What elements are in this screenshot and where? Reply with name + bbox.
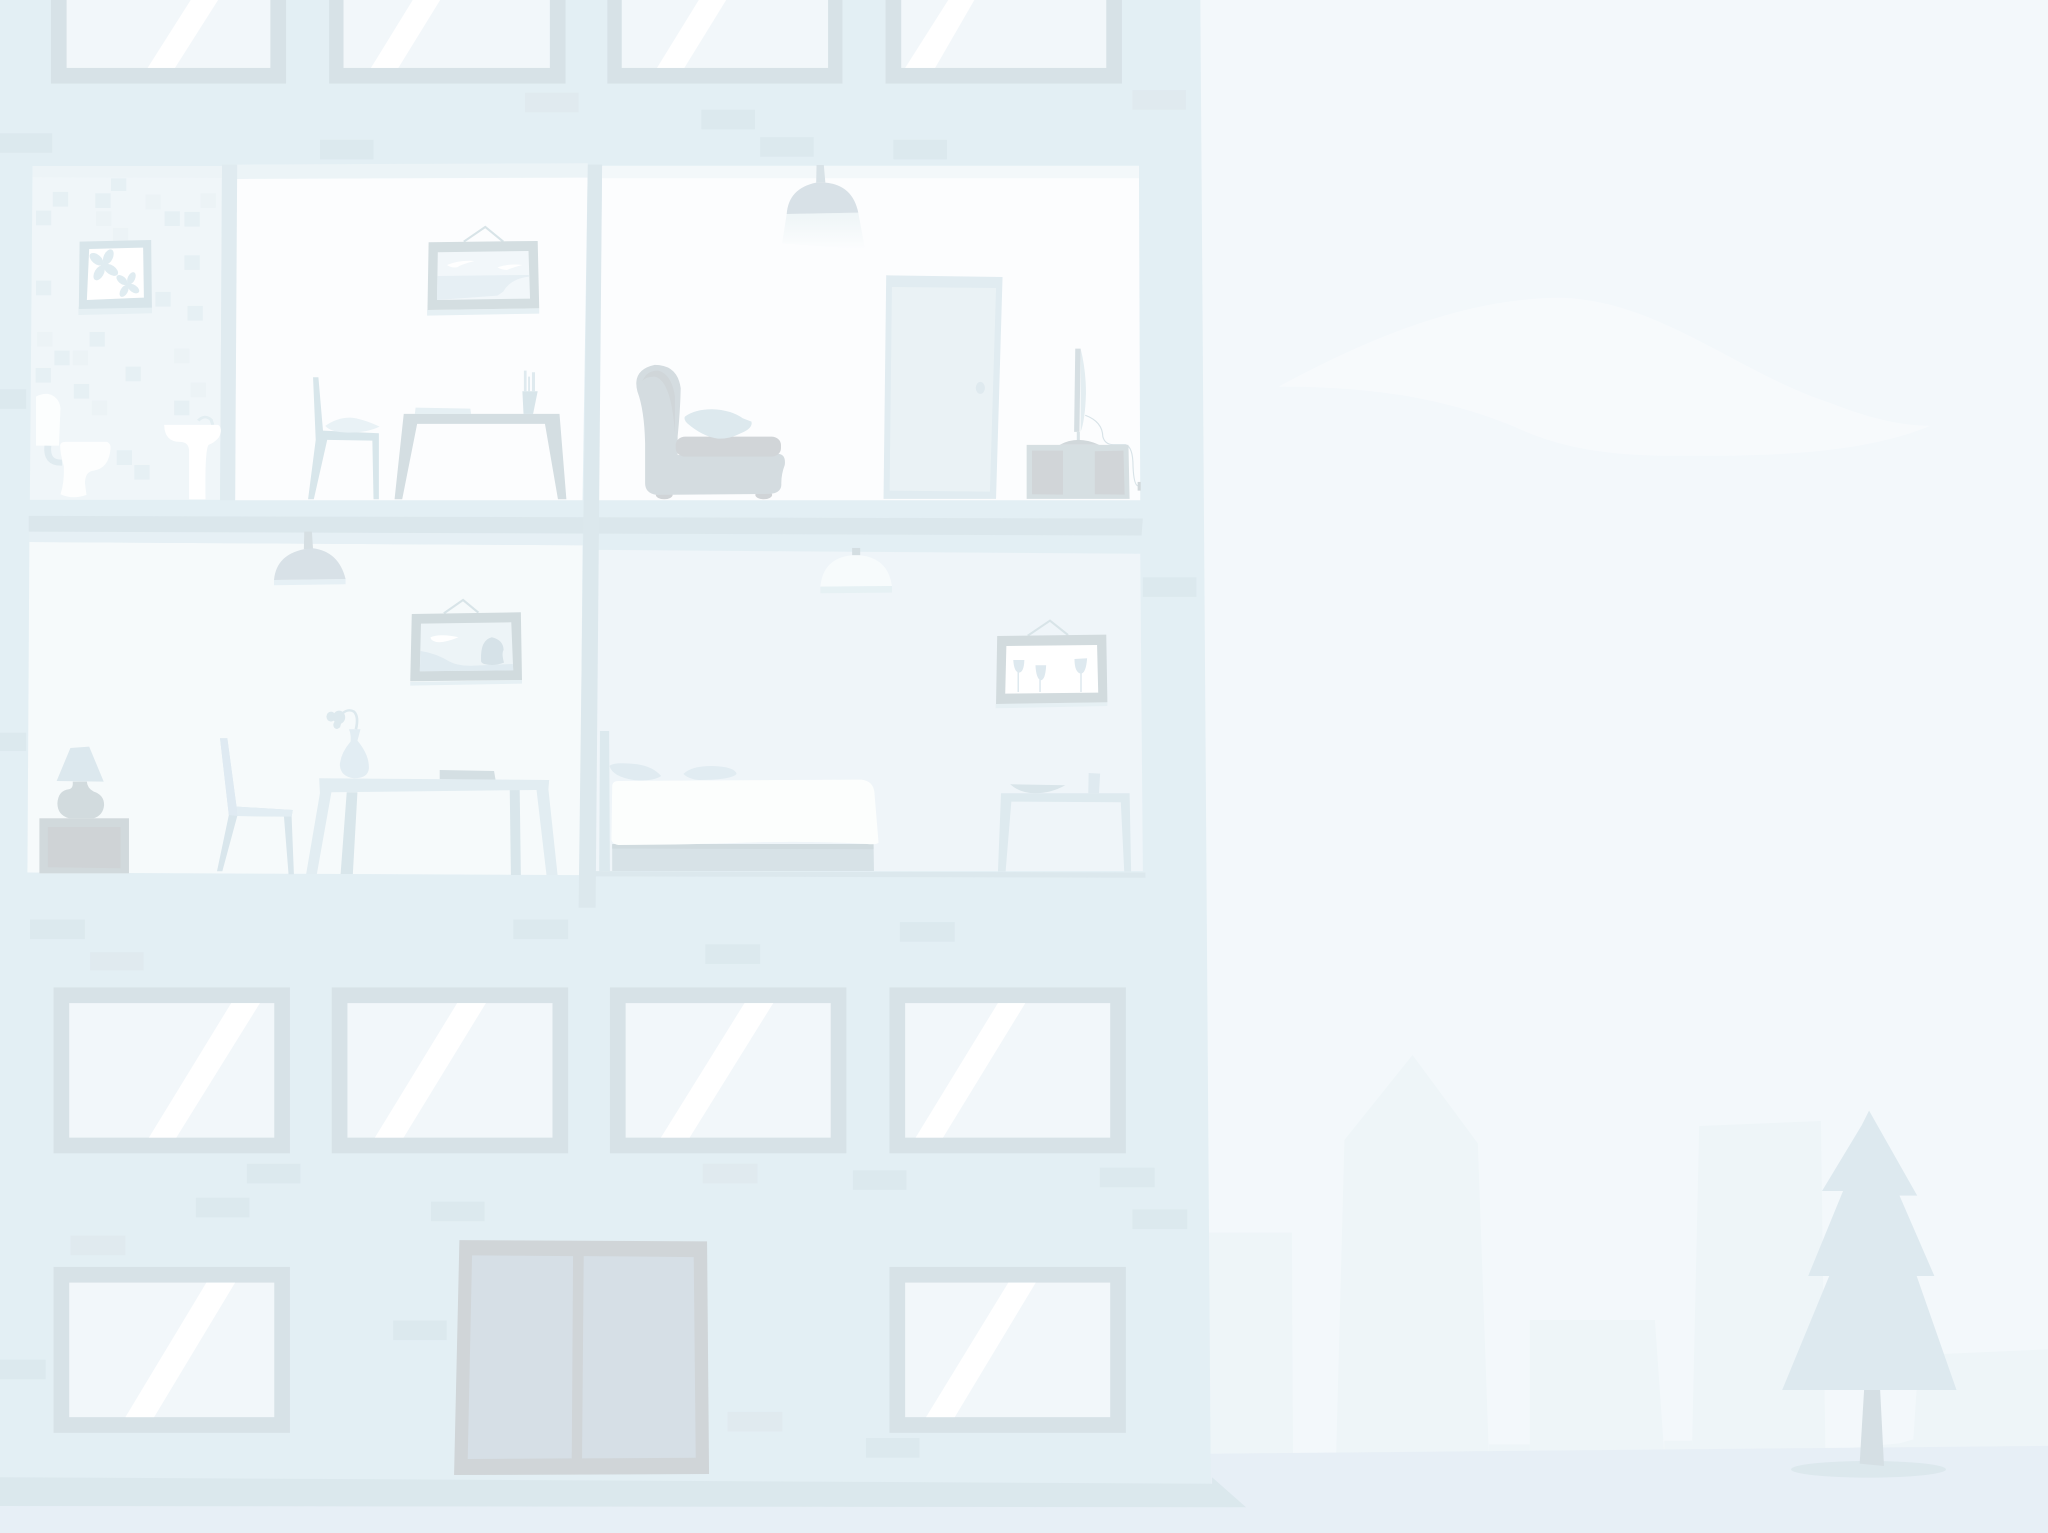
landscape picture xyxy=(410,600,522,686)
facade bricks xyxy=(0,90,1196,1458)
bed xyxy=(599,731,879,871)
dining chair xyxy=(308,377,380,499)
building base plinth xyxy=(0,1477,1246,1507)
flower picture xyxy=(78,240,152,315)
pendant lamp xyxy=(274,532,346,585)
lower left room wall xyxy=(27,542,583,875)
panel: upper floor interior xyxy=(30,163,1141,500)
bedside lamp and cabinet xyxy=(39,747,129,873)
third row windows xyxy=(54,987,1126,1153)
armchair xyxy=(636,365,785,499)
entrance double door xyxy=(454,1240,709,1475)
right ceiling band xyxy=(602,166,1139,178)
living room wall xyxy=(235,165,588,500)
living room furnishings xyxy=(636,165,1141,499)
ceiling bands xyxy=(236,163,588,179)
tv on cabinet xyxy=(1027,349,1141,499)
wine glass picture xyxy=(996,621,1107,708)
floor slab band xyxy=(29,516,1143,536)
lower right ceiling band xyxy=(598,534,1140,550)
tree canopy xyxy=(1782,1111,1957,1390)
white pendant lamp xyxy=(820,548,892,593)
panel: lower floor interior xyxy=(27,516,1145,878)
ceiling lamp with light xyxy=(782,165,865,250)
chair xyxy=(217,738,294,874)
bedroom-side room wall xyxy=(598,166,1140,500)
right room furnishings xyxy=(599,548,1131,872)
ground xyxy=(0,1446,2048,1533)
side table with bowl xyxy=(998,773,1131,872)
lower right floor strip xyxy=(596,871,1145,878)
central structural column xyxy=(579,165,602,908)
toilet xyxy=(36,394,111,497)
lower right room wall xyxy=(596,550,1143,871)
distant skyline xyxy=(1209,1055,2048,1456)
tree ground shadow xyxy=(1791,1461,1946,1478)
sink xyxy=(164,417,221,499)
lower left ceiling band xyxy=(29,530,583,545)
interior door xyxy=(884,275,1003,499)
bathroom fixtures and art xyxy=(36,227,566,499)
dining table xyxy=(395,371,566,499)
seascape picture xyxy=(427,227,539,316)
bathroom divider column xyxy=(220,165,237,500)
left room furnishings xyxy=(39,532,558,875)
ground floor windows xyxy=(54,1267,1126,1433)
cloud xyxy=(1279,298,1930,456)
top row windows xyxy=(51,0,1122,84)
bathroom wall xyxy=(30,166,222,500)
tree xyxy=(1782,1111,1957,1478)
tree trunk xyxy=(1860,1390,1884,1466)
table with vase xyxy=(306,710,558,875)
building facade xyxy=(0,0,1211,1485)
